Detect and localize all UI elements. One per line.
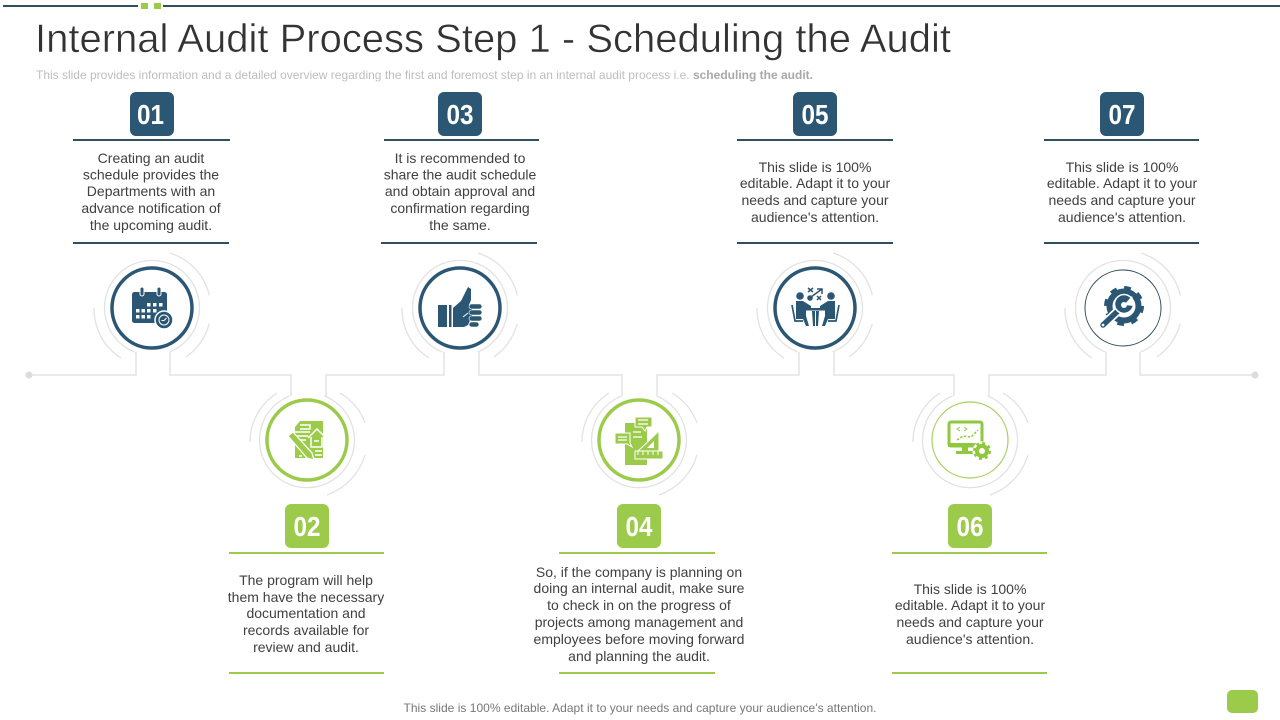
icon: thumbs up in ring <box>402 253 517 358</box>
text 05 <box>737 140 893 243</box>
subtitle: This slide provides information and a detailed overview regarding the first and foremost step in an internal audit process i.e. scheduling the audit. <box>36 68 813 82</box>
text 02: review and audit. <box>253 639 359 655</box>
text 07: needs and capture your <box>1048 192 1196 208</box>
text 04: So, if the company is planning on <box>536 564 742 580</box>
text 02: documentation and <box>246 605 366 621</box>
badge 07 <box>1100 92 1144 136</box>
text 02 <box>228 553 384 673</box>
icon: clipboard and ruler in ring <box>582 393 697 495</box>
step 01 <box>73 92 230 358</box>
badge 03: 03 <box>446 99 474 130</box>
text 05: This slide is 100% <box>759 159 871 175</box>
text 03: confirmation regarding <box>390 200 530 216</box>
top rule with green squares <box>3 3 1280 9</box>
badge 02 <box>285 504 329 548</box>
text 07: This slide is 100% <box>1066 159 1178 175</box>
text 03: It is recommended to <box>395 150 526 166</box>
step 04 <box>534 393 745 673</box>
icon: monitor and gear in ring <box>913 393 1028 495</box>
icon: document and house in ring <box>250 393 365 495</box>
text 05: needs and capture your <box>741 192 889 208</box>
text 04: doing an internal audit, make sure <box>534 580 745 596</box>
title: Internal Audit Process Step 1 - Scheduling the Audit <box>35 17 951 61</box>
text 03 <box>381 140 539 243</box>
step 02 <box>228 393 384 673</box>
badge 01 <box>130 92 174 136</box>
text 01: Departments with an <box>87 183 215 199</box>
step 03 <box>381 92 539 358</box>
timeline connector <box>26 352 1258 396</box>
text 02: records available for <box>243 622 369 638</box>
text 04: and planning the audit. <box>568 648 710 664</box>
green corner tab <box>1227 690 1258 713</box>
icon: calendar in ring <box>94 253 209 358</box>
text 01: the upcoming audit. <box>90 217 212 233</box>
text 01: Creating an audit <box>98 150 204 166</box>
badge 04 <box>617 504 661 548</box>
text 01: advance notification of <box>81 200 221 216</box>
icon: gear and wrench in ring <box>1065 253 1180 358</box>
badge 04: 04 <box>626 511 653 542</box>
badge 02: 02 <box>294 511 320 542</box>
text 02: The program will help <box>239 572 373 588</box>
text 06: editable. Adapt it to your <box>895 597 1045 613</box>
text 07 <box>1044 140 1199 243</box>
text 06: This slide is 100% <box>914 581 1026 597</box>
text 01 <box>73 140 230 243</box>
text 07: audience's attention. <box>1058 209 1186 225</box>
text 06: audience's attention. <box>906 631 1034 647</box>
text 06: needs and capture your <box>896 614 1044 630</box>
badge 07: 07 <box>1108 99 1136 130</box>
text 06 <box>892 553 1047 673</box>
text 03: and obtain approval and <box>385 183 535 199</box>
text 04: employees before moving forward <box>534 631 744 647</box>
step 07 <box>1044 92 1199 358</box>
text 04: to check in on the progress of <box>547 597 731 613</box>
step 06 <box>892 393 1047 673</box>
badge 03 <box>438 92 482 136</box>
text 07: editable. Adapt it to your <box>1047 175 1197 191</box>
badge 06 <box>948 504 992 548</box>
text 04: projects among management and <box>535 614 743 630</box>
text 05: audience's attention. <box>751 209 879 225</box>
text 02: them have the necessary <box>228 589 384 605</box>
footer note: This slide is 100% editable. Adapt it to your needs and capture your audience's attention. <box>404 701 876 715</box>
step 05 <box>737 92 893 358</box>
icon: meeting at table in ring <box>757 253 872 358</box>
text 03: the same. <box>429 217 491 233</box>
text 01: schedule provides the <box>83 166 219 182</box>
text 03: share the audit schedule <box>384 166 536 182</box>
badge 06: 06 <box>956 511 984 542</box>
badge 05 <box>793 92 837 136</box>
badge 05: 05 <box>802 99 828 130</box>
badge 01: 01 <box>137 99 164 130</box>
text 04 <box>534 553 745 673</box>
text 05: editable. Adapt it to your <box>740 175 890 191</box>
